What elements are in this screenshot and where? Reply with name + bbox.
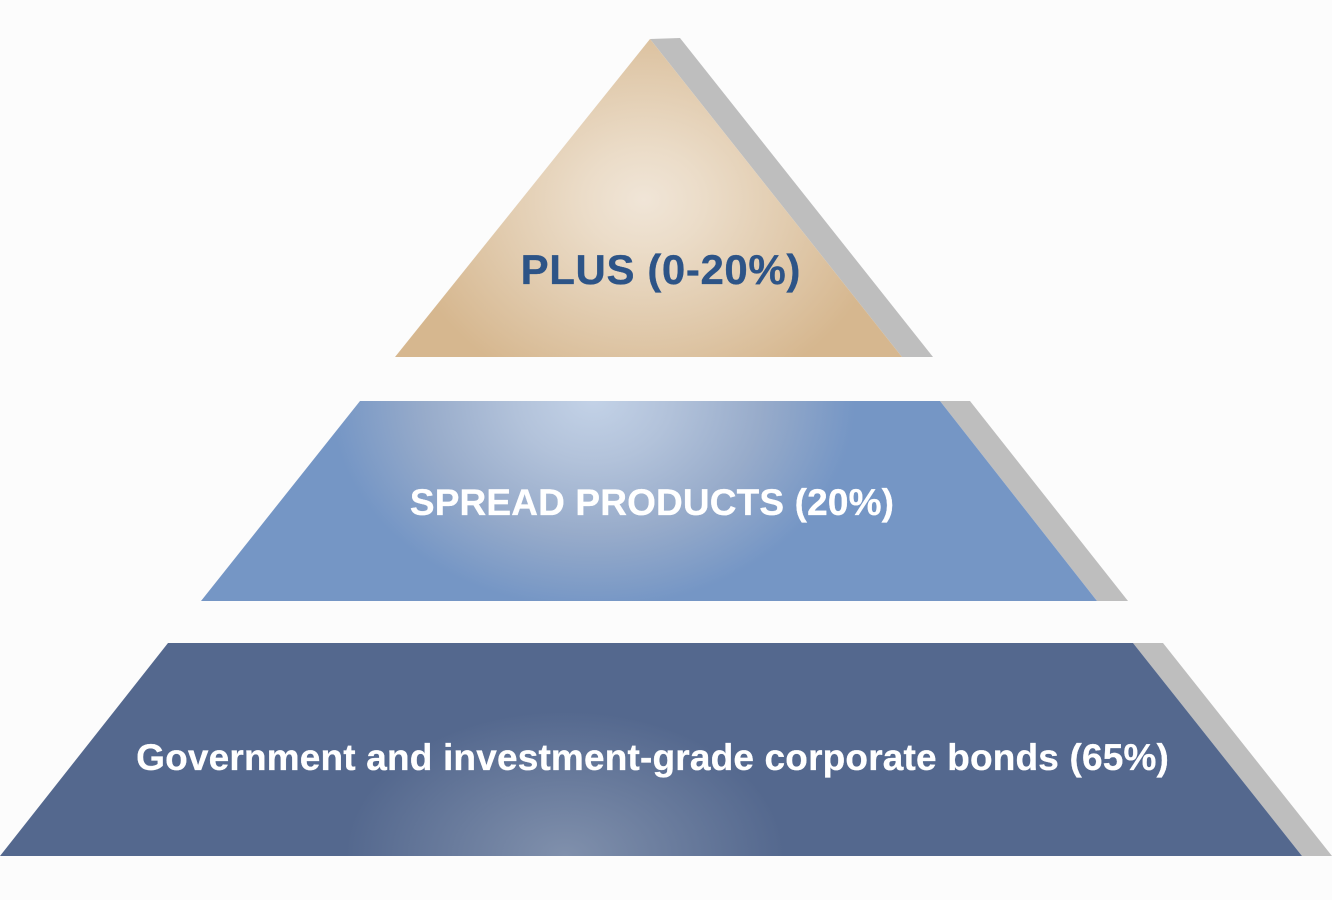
top tier: plus: [395, 38, 933, 357]
middle tier: spread products: [201, 401, 1128, 601]
bottom tier: government and corporate bonds: Government and investment-grade corporate bonds (65%): [136, 737, 1169, 778]
bottom tier: government and corporate bonds: [0, 643, 1332, 856]
middle tier: spread products: SPREAD PRODUCTS (20%): [410, 482, 894, 523]
top tier: plus: PLUS (0-20%): [521, 246, 801, 293]
